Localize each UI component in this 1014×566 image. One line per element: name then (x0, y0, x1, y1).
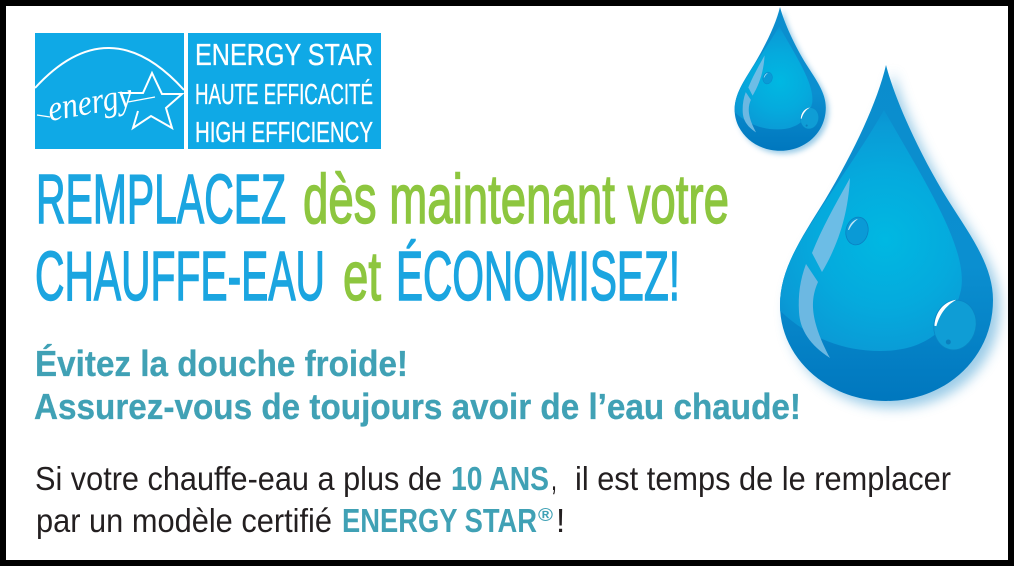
headline: dès maintenant votre (303, 160, 729, 238)
body text: 10 ANS (451, 460, 549, 497)
headline: et (343, 237, 381, 315)
subheading: Assurez-vous de toujours avoir de l’eau chaude! (34, 386, 801, 427)
body text: , (551, 460, 557, 497)
headline: CHAUFFE-EAU (35, 237, 325, 315)
headline: ÉCONOMISEZ! (396, 237, 680, 315)
headline: REMPLACEZ (36, 160, 286, 238)
body text: ENERGY STAR (342, 502, 537, 539)
logo: ENERGY STAR (35, 33, 381, 149)
logo panel: certification wording: HAUTE EFFICACITÉ (195, 78, 373, 111)
logo panel: energy star mark: energy (44, 75, 135, 129)
logo panel: certification wording (188, 33, 381, 149)
subheading: Évitez la douche froide! (35, 343, 408, 384)
body text: il est temps de le remplacer (575, 460, 951, 497)
body text: ® (538, 505, 553, 525)
body text: par un modèle certifié (36, 502, 332, 539)
icon: large water drop (770, 65, 1000, 408)
logo panel: certification wording: HIGH EFFICIENCY (195, 117, 373, 149)
icon: small water drop (730, 7, 829, 154)
logo panel: certification wording: ENERGY STAR (195, 37, 373, 72)
subheading (34, 343, 801, 427)
body text: ! (556, 502, 565, 539)
logo panel: energy star mark (35, 33, 184, 149)
headline (35, 160, 729, 315)
body text: Si votre chauffe-eau a plus de (35, 460, 442, 497)
body text (35, 460, 951, 539)
